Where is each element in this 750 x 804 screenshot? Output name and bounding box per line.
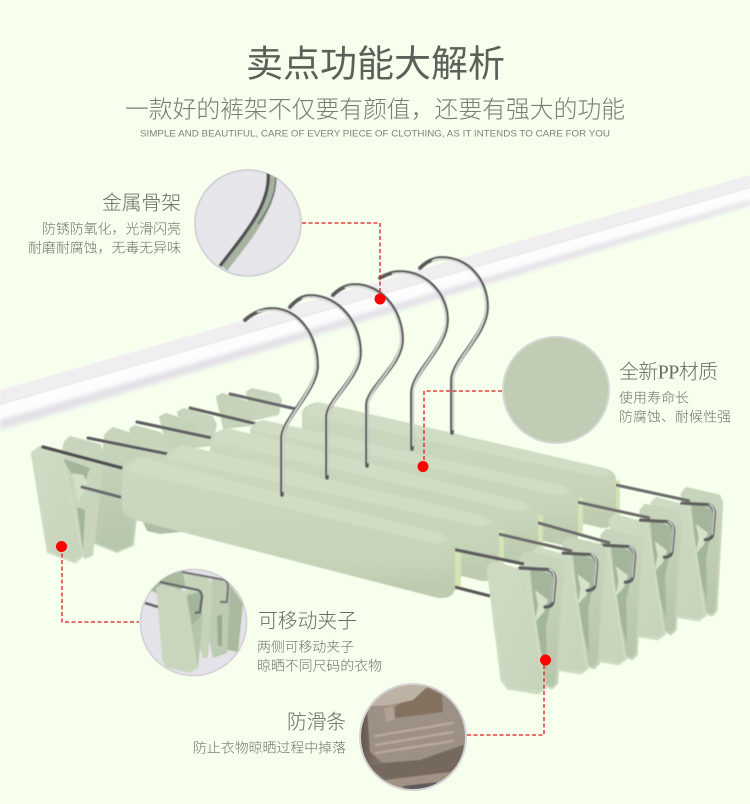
english tagline: SIMPLE AND BEAUTIFUL, CARE OF EVERY PIECE OF CLOTHING, AS IT INTENDS TO CARE FOR YOU — [140, 128, 610, 139]
leader: movable clip — [62, 547, 139, 622]
hanger 5 (rear) — [217, 258, 722, 620]
label: metal frame: 金属骨架 — [102, 192, 181, 214]
detail circle: green surface — [503, 337, 609, 443]
feature: anti-slip strip — [193, 680, 466, 795]
title: 卖点功能大解析 — [246, 44, 505, 84]
feature: metal frame — [28, 170, 301, 276]
leader: anti-slip strip — [467, 660, 544, 735]
leader: PP material — [424, 391, 502, 467]
leader: metal frame — [302, 223, 380, 299]
description: PP material — [619, 389, 731, 424]
clothes rail — [0, 175, 750, 430]
subtitle: 一款好的裤架不仅要有颜值，还要有强大的功能 — [125, 96, 625, 124]
hanger product photo — [32, 258, 722, 693]
description: movable clips: 晾晒不同尺码的衣物 — [257, 657, 382, 673]
detail circle: anti-slip ridges — [355, 680, 466, 795]
red dots — [56, 294, 551, 666]
hanger 3 — [130, 285, 642, 664]
description: metal frame: 耐磨耐腐蚀，无毒无异味 — [28, 239, 181, 255]
feature: PP material — [503, 337, 731, 443]
heading block — [125, 44, 625, 139]
description: anti-slip strip: 防止衣物晾晒过程中掉落 — [193, 739, 346, 755]
label: movable clips: 可移动夹子 — [258, 610, 357, 632]
hanger 4 — [160, 272, 681, 639]
feature: movable clips — [140, 570, 382, 676]
description: metal frame: 防锈防氧化，光滑闪亮 — [42, 220, 181, 236]
description: PP material: 防腐蚀、耐候性强 — [619, 408, 731, 424]
description: movable clips — [257, 638, 382, 673]
label: anti-slip strip: 防滑条 — [287, 712, 346, 734]
label: PP material: 全新PP材质 — [619, 362, 718, 384]
hanger 1 (front) — [32, 309, 563, 693]
detail circle: clips — [140, 570, 246, 676]
detail circle: metal wire — [195, 170, 301, 276]
description: metal frame — [28, 220, 181, 255]
hanger 2 — [88, 296, 604, 673]
description: movable clips: 两侧可移动夹子 — [257, 638, 354, 654]
callout lines — [62, 223, 544, 735]
description: PP material: 使用寿命长 — [619, 389, 689, 405]
